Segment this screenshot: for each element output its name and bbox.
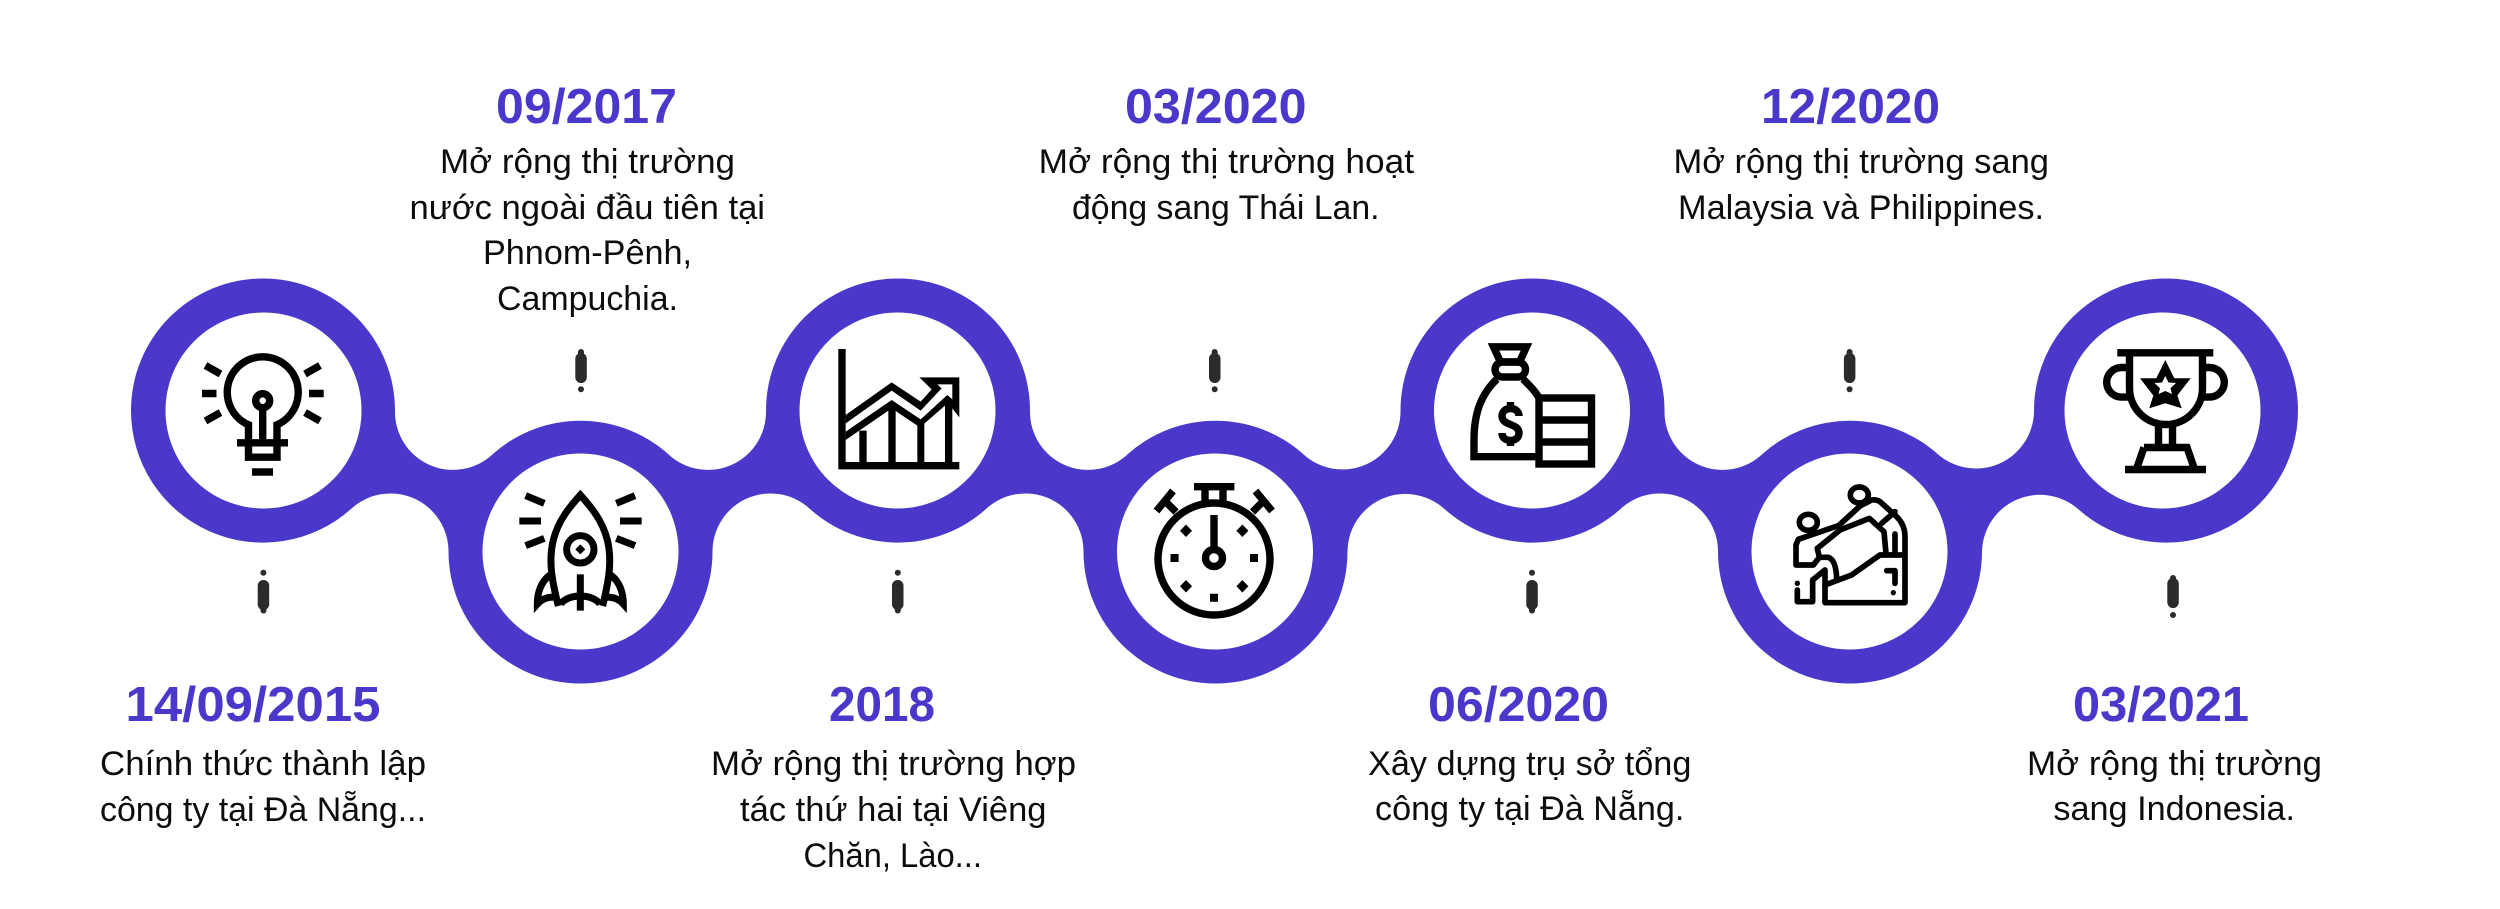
milestone: 09/2017: Campuchia. [497, 280, 678, 318]
icon: stopwatch [1156, 487, 1272, 615]
marker above step 6 [1844, 349, 1855, 392]
milestone: 06/2020: 06/2020 [1428, 678, 1609, 732]
milestone: 12/2020: Mở rộng thị trường sang [1674, 143, 2049, 181]
milestone: 09/2017: 09/2017 [496, 80, 677, 134]
icon: trophy [2107, 353, 2224, 470]
milestone: 03/2020 [1039, 80, 1415, 227]
timeline band [131, 278, 2298, 684]
milestone: 03/2021: 03/2021 [2073, 678, 2249, 732]
marker below step 3 [892, 570, 904, 614]
milestone: 03/2021 [2027, 678, 2322, 828]
milestone: 03/2020: động sang Thái Lan. [1072, 189, 1380, 227]
icon: rising chart [838, 349, 959, 469]
milestone: 09/2017: Phnom-Pênh, [483, 234, 692, 272]
milestone: 09/2017: nước ngoài đầu tiên tại [410, 189, 765, 227]
marker below step 5 [1526, 570, 1538, 614]
marker above step 2 [575, 349, 587, 392]
milestone: 12/2020: 12/2020 [1761, 80, 1940, 134]
milestone: 03/2021: sang Indonesia. [2053, 790, 2295, 828]
milestone: 14/09/2015: Chính thức thành lập [100, 745, 426, 783]
milestone: 06/2020: công ty tại Đà Nẵng. [1375, 790, 1684, 828]
marker above step 4 [1209, 349, 1220, 392]
milestone: 03/2020: Mở rộng thị trường hoạt [1039, 143, 1415, 181]
milestone: 09/2017 [410, 80, 765, 318]
milestone: 06/2020 [1368, 678, 1691, 828]
milestone: 2018: Chăn, Lào... [804, 837, 982, 875]
icon: light bulb [202, 357, 324, 472]
milestone: 2018: Mở rộng thị trường hợp [711, 745, 1076, 783]
milestone: 09/2017: Mở rộng thị trường [440, 143, 735, 181]
milestone: 14/09/2015 [100, 678, 426, 829]
milestone: 14/09/2015: 14/09/2015 [126, 678, 380, 732]
milestone: 06/2020: Xây dựng trụ sở tổng [1368, 745, 1691, 783]
milestone: 2018: 2018 [829, 678, 935, 732]
milestone: 12/2020: Malaysia và Philippines. [1678, 189, 2044, 227]
milestone: 14/09/2015: công ty tại Đà Nẵng... [100, 791, 426, 829]
milestone: 2018: tác thứ hai tại Viêng [740, 791, 1046, 829]
milestone: 03/2020: 03/2020 [1125, 80, 1306, 134]
white icon discs [166, 312, 2260, 650]
milestone: 03/2021: Mở rộng thị trường [2027, 745, 2322, 783]
icon: people climbing [1795, 487, 1905, 603]
marker below step 1 [258, 570, 269, 614]
milestone: 2018 [711, 678, 1076, 875]
icon: money bag and coins [1474, 347, 1592, 464]
icon: rocket [519, 495, 642, 611]
marker below step 7 [2167, 575, 2179, 618]
milestone: 12/2020 [1674, 80, 2049, 227]
